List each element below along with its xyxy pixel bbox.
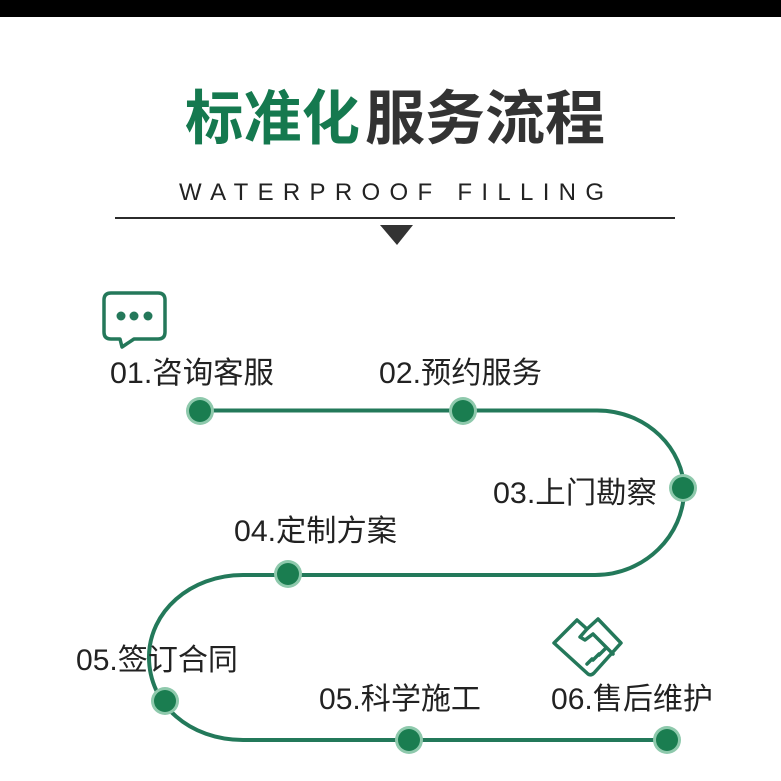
step 05 construction xyxy=(319,683,481,754)
down arrow xyxy=(380,225,413,245)
title: 服务流程 xyxy=(365,86,605,152)
step 02: 02.预约服务 xyxy=(379,357,542,390)
step 02 xyxy=(379,357,542,425)
step 01: 01.咨询客服 xyxy=(110,357,274,390)
step 04: 04.定制方案 xyxy=(234,515,397,548)
step 05 construction: 05.科学施工 xyxy=(319,683,481,716)
process path xyxy=(149,410,684,740)
subtitle: WATERPROOF FILLING xyxy=(179,179,604,206)
step 01 xyxy=(110,357,274,425)
step 03: 03.上门勘察 xyxy=(493,477,657,510)
divider line xyxy=(115,217,675,219)
icon: handshake xyxy=(554,619,621,675)
step 06 xyxy=(551,683,713,754)
title: 标准化 xyxy=(185,86,360,152)
step 05 sign contract: 05.签订合同 xyxy=(76,644,238,677)
step 06: 06.售后维护 xyxy=(551,683,713,716)
icon: chat bubble xyxy=(104,293,165,347)
step 04 xyxy=(234,515,397,588)
step 05 sign contract xyxy=(76,644,238,715)
top black bar xyxy=(0,0,781,17)
title xyxy=(185,86,605,152)
